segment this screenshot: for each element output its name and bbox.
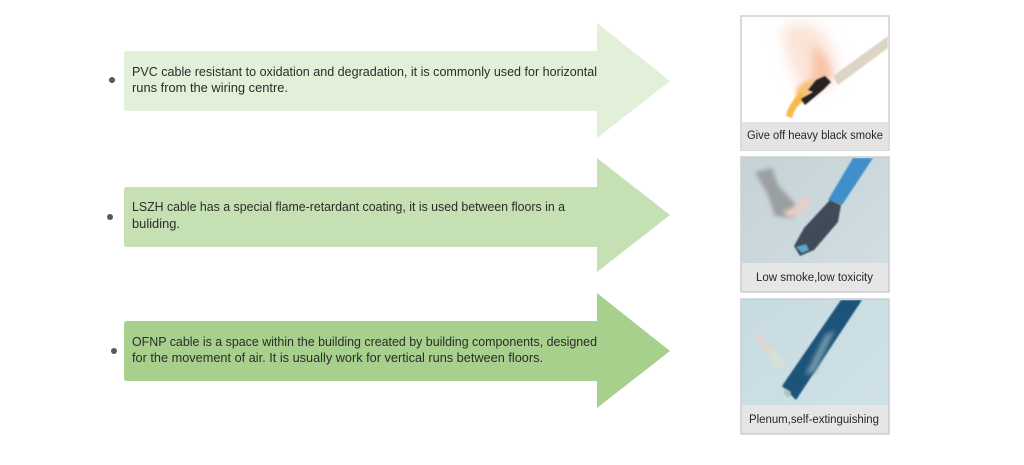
text: LSZH cable description: buliding. [132, 217, 180, 231]
panel: OFNP plenum cable photo card [741, 299, 889, 434]
photo: dark blue self-extinguished cable [755, 300, 862, 400]
text: PVC cable description: runs from the wiring centre. [132, 81, 288, 95]
text: OFNP cable description: for the movement of air. It is usually work for vertical runs between floors. [132, 351, 543, 365]
photo: burning cable with flame [782, 23, 888, 118]
caption text: Give off heavy black smoke [747, 128, 883, 142]
text: OFNP cable description: OFNP cable is a space within the building created by building components, designed [132, 335, 597, 349]
bullet 3 [111, 348, 117, 354]
caption bar [742, 122, 888, 150]
arrow: OFNP cable [124, 293, 670, 408]
bullet 2 [107, 214, 113, 220]
text: PVC cable description [132, 65, 597, 95]
caption bar [742, 263, 888, 291]
arrow: LSZH cable [124, 158, 670, 272]
text: LSZH cable description: LSZH cable has a special flame-retardant coating, it is used between floors in a [132, 200, 565, 214]
panel: burning PVC cable photo card [741, 16, 889, 150]
text: PVC cable description: PVC cable resistant to oxidation and degradation, it is commonly used for horizontal [132, 65, 597, 79]
text: LSZH cable description [132, 200, 565, 231]
bullet 1 [109, 77, 115, 83]
panel: burnt LSZH cable photo card [741, 157, 889, 292]
photo: blue cable with charred end [755, 158, 873, 256]
arrow: PVC cable [124, 23, 670, 138]
text: OFNP cable description [132, 335, 597, 365]
caption text: Low smoke,low toxicity [756, 270, 874, 284]
caption text: Plenum,self-extinguishing [749, 412, 879, 426]
caption bar [742, 405, 888, 433]
